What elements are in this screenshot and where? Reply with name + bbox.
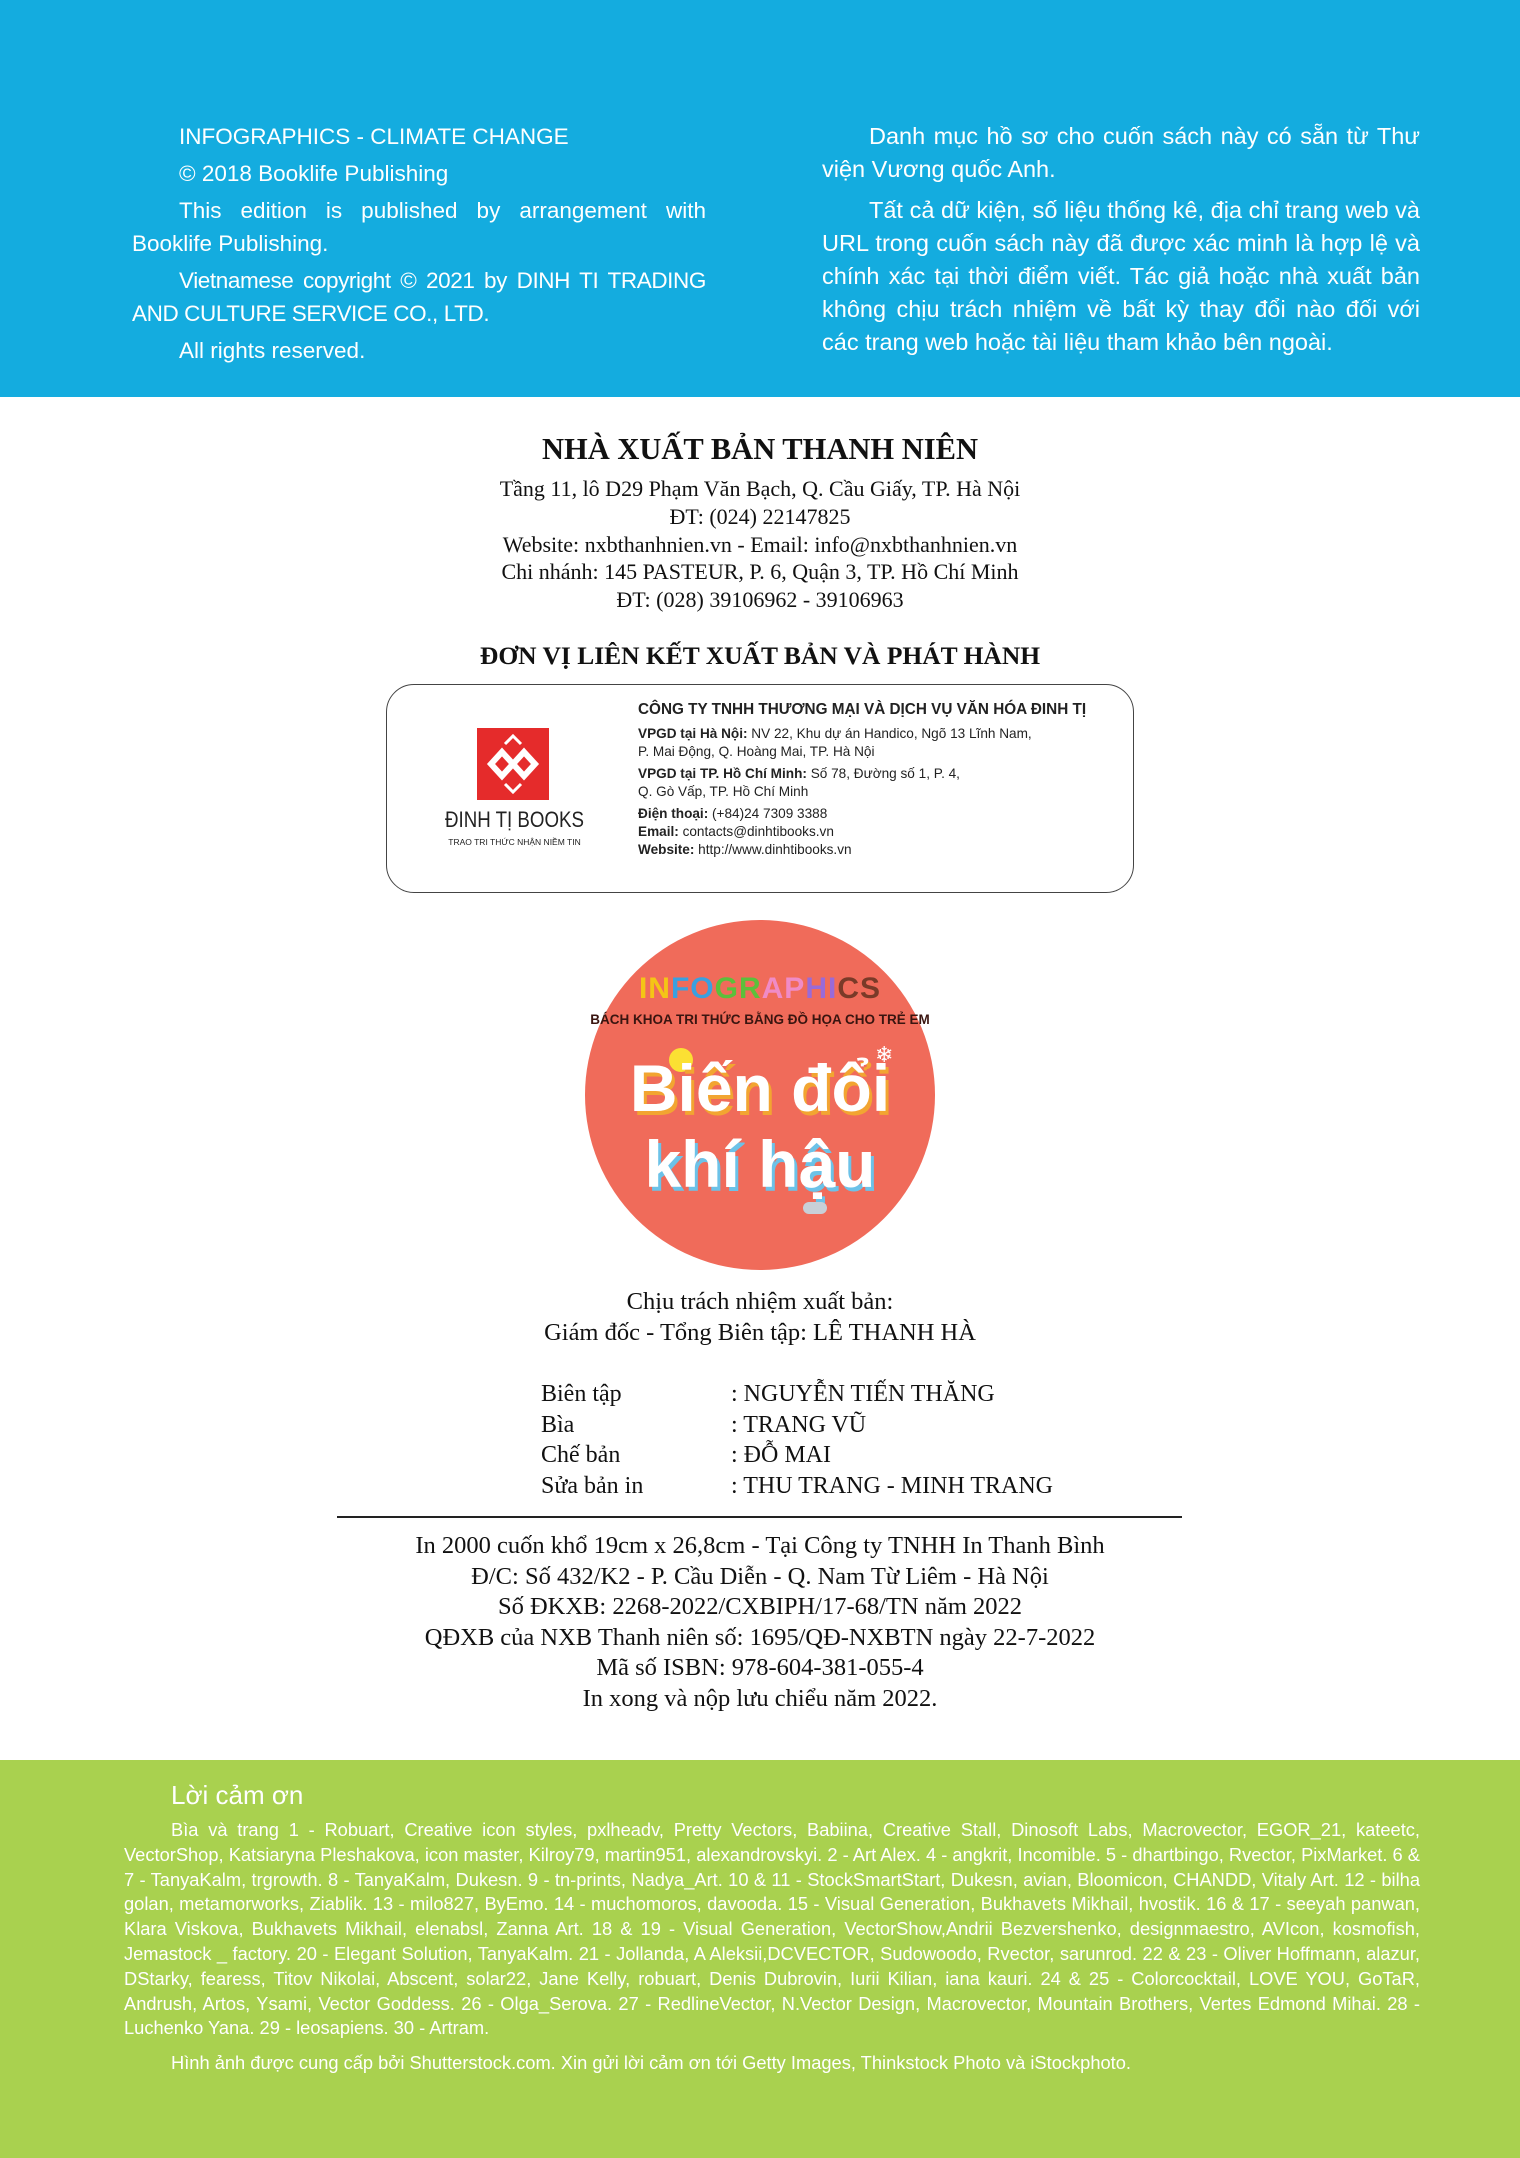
text: staff credits: : ĐỖ MAI [731, 1442, 831, 1468]
text: responsible: Giám đốc - Tổng Biên tập: LÊ THANH HÀ [544, 1319, 976, 1346]
text: responsible: Chịu trách nhiệm xuất bản: [627, 1288, 893, 1315]
text: company details: VPGD tại TP. Hồ Chí Minh: Số 78, Đường số 1, P. 4, [638, 766, 960, 781]
text: staff credits [541, 1378, 1053, 1498]
text: company details: Website: http://www.dinhtibooks.vn [638, 842, 852, 857]
text: company details [638, 700, 1086, 857]
text: print info: Đ/C: Số 432/K2 - P. Cầu Diễn - Q. Nam Từ Liêm - Hà Nội [471, 1562, 1049, 1590]
text: INFOGRAPHICS logo: INFOGRAPHICS [639, 972, 881, 1005]
panel: partner box: TRAO TRI THỨC NHẬN NIỀM TIN [448, 837, 581, 847]
panel: green acknowledgements [0, 1760, 1520, 2158]
text: cover title: Biến đổi [630, 1051, 890, 1125]
text: print info [415, 1532, 1105, 1712]
text: right catalogue block [822, 123, 1420, 355]
text: company details: Email: contacts@dinhtibooks.vn [638, 824, 834, 839]
text: publisher address: Chi nhánh: 145 PASTEUR, P. 6, Quận 3, TP. Hồ Chí Minh [501, 559, 1019, 584]
text: left copyright block: © 2018 Booklife Publishing [179, 161, 448, 186]
text: print info: QĐXB của NXB Thanh niên số: 1695/QĐ-NXBTN ngày 22-7-2022 [425, 1624, 1095, 1650]
text: subtitle: BÁCH KHOA TRI THỨC BẰNG ĐỒ HỌA CHO TRẺ EM [590, 1012, 930, 1027]
text: company details: Điện thoại: (+84)24 7309 3388 [638, 806, 827, 821]
panel: partner box [386, 684, 1134, 893]
text: publisher address: Website: nxbthanhnien.vn - Email: info@nxbthanhnien.vn [503, 532, 1017, 557]
text: right catalogue block: Tất cả dữ kiện, số liệu thống kê, địa chỉ trang web và URL trong cuốn sách này đã được xác minh là hợp lệ và chính xác tại thời điểm viết. Tác giả hoặc nhà xuất bản không chịu trách nhiệm về bất kỳ thay đổi nào đối với các trang web hoặc tài liệu tham khảo bên ngoài. [822, 197, 1420, 355]
text: publisher address: ĐT: (024) 22147825 [670, 504, 850, 529]
panel: blue header [0, 0, 1520, 397]
text: publisher address [500, 476, 1020, 612]
text: left copyright block: This edition is published by arrangement with Booklife Publishing. [132, 198, 706, 256]
text: print info: In xong và nộp lưu chiểu năm 2022. [583, 1684, 937, 1712]
icon: cloud [803, 1202, 827, 1214]
text: responsible [544, 1288, 976, 1346]
icon: sun [669, 1048, 693, 1072]
heading: publisher: NHÀ XUẤT BẢN THANH NIÊN [542, 432, 978, 466]
text: staff credits: Chế bản [541, 1442, 620, 1468]
icon: snowflake: ❄ [875, 1042, 893, 1067]
text: print info: Mã số ISBN: 978-604-381-055-4 [596, 1654, 924, 1681]
text: right catalogue block: Danh mục hồ sơ cho cuốn sách này có sẵn từ Thư viện Vương quốc Anh. [822, 123, 1420, 182]
text: credits paragraph: Bìa và trang 1 - Robuart, Creative icon styles, pxlheadv, Pretty Vectors, Babiina, Creative Stall, Dinosoft Labs, Macrovector, EGOR_21, kateetc, VectorShop, Katsiaryna Pleshakova, icon master, Kilroy79, martin951, alexandrovskyi. 2 - Art Alex. 4 - angkrit, Incomible. 5 - dhartbingo, Rvector, PixMarket. 6 & 7 - TanyaKalm, trgrowth. 8 - TanyaKalm, Dukesn. 9 - tn-prints, Nadya_Art. 10 & 11 - StockSmartStart, Dukesn, avian, Bloomicon, CHANDD, Vitaly Art. 12 - bilha golan, metamorworks, Ziablik. 13 - milo827, ByEmo. 14 - muchomoros, davooda. 15 - Visual Generation, Bukhavets Mikhail, hvostik. 16 & 17 - seeyah panwan, Klara Viskova, Bukhavets Mikhail, elenabsl, Zanna Art. 18 & 19 - Visual Generation, VectorShow,Andrii Bezvershenko, designmaestro, AVIcon, kosmofish, Jemastock _ factory. 20 - Elegant Solution, TanyaKalm. 21 - Jollanda, A Aleksii,DCVECTOR, Sudowoodo, Rvector, sarunrod. 22 & 23 - Oliver Hoffmann, alazur, DStarky, fearess, Titov Nikolai, Abscent, solar22, Jane Kelly, robuart, Denis Dubrovin, Iurii Kilian, iana kauri. 24 & 25 - Colorcocktail, LOVE YOU, GoTaR, Andrush, Artos, Ysami, Vector Goddess. 26 - Olga_Serova. 27 - RedlineVector, N.Vector Design, Macrovector, Mountain Brothers, Vertes Edmond Mihai. 28 - Luchenko Yana. 29 - leosapiens. 30 - Artram. [124, 1819, 1420, 2038]
text: company details: Q. Gò Vấp, TP. Hồ Chí Minh [638, 784, 808, 799]
text: staff credits: : NGUYỄN TIẾN THĂNG [731, 1381, 995, 1407]
text: left copyright block: All rights reserved. [179, 338, 365, 363]
heading: thanks: Lời cảm ơn [171, 1780, 303, 1810]
text: print info: In 2000 cuốn khổ 19cm x 26,8cm - Tại Công ty TNHH In Thanh Bình [415, 1532, 1105, 1559]
heading: partner: ĐƠN VỊ LIÊN KẾT XUẤT BẢN VÀ PHÁT HÀNH [480, 641, 1040, 670]
text: logo name: ĐINH TỊ BOOKS [445, 807, 584, 832]
text: left copyright block: Vietnamese copyright © 2021 by DINH TI TRADING AND CULTURE SERVICE CO., LTD. [132, 268, 706, 326]
text: staff credits: : THU TRANG - MINH TRANG [731, 1472, 1053, 1498]
text: publisher address: ĐT: (028) 39106962 - 39106963 [616, 587, 904, 612]
text: staff credits: Sửa bản in [541, 1472, 643, 1498]
text: publisher address: Tầng 11, lô D29 Phạm Văn Bạch, Q. Cầu Giấy, TP. Hà Nội [500, 476, 1020, 501]
text: cover title [630, 1051, 890, 1203]
text: staff credits: Bìa [541, 1412, 574, 1438]
text: company details: P. Mai Động, Q. Hoàng Mai, TP. Hà Nội [638, 744, 874, 759]
text: print info: Số ĐKXB: 2268-2022/CXBIPH/17-68/TN năm 2022 [498, 1593, 1022, 1620]
text: company details: CÔNG TY TNHH THƯƠNG MẠI VÀ DỊCH VỤ VĂN HÓA ĐINH TỊ [638, 701, 1086, 718]
text: left copyright block: INFOGRAPHICS - CLIMATE CHANGE [179, 124, 569, 149]
icon: book cover circle [585, 920, 935, 1270]
text: cover title: khí hậu [644, 1127, 876, 1201]
text: image source: Hình ảnh được cung cấp bởi Shutterstock.com. Xin gửi lời cảm ơn tới Getty Images, Thinkstock Photo và iStockphoto. [171, 2052, 1131, 2073]
text: left copyright block [132, 124, 706, 363]
text: company details: VPGD tại Hà Nội: NV 22, Khu dự án Handico, Ngõ 13 Lĩnh Nam, [638, 726, 1032, 741]
text: staff credits: Biên tập [541, 1381, 622, 1407]
icon: Dinh Ti logo [477, 728, 549, 800]
text: staff credits: : TRANG VŨ [731, 1412, 866, 1438]
